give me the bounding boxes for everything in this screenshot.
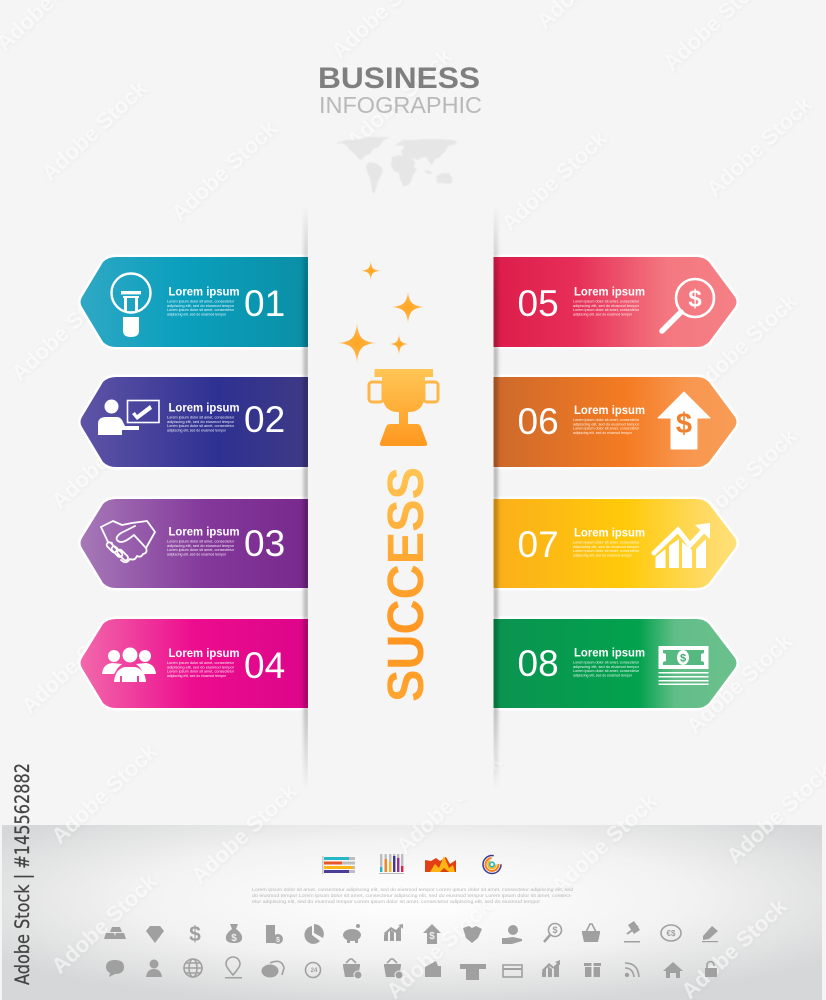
footer paragraph: do eiusmod tempor Lorem ipsum dolor sit amet, consectetur adipiscing elit, sed do eiusmod tempor Lorem ipsum dolor sit amet, consect- bbox=[252, 893, 573, 898]
icon: growth bars bbox=[384, 924, 403, 941]
icon: magnifier with dollar bbox=[662, 279, 714, 331]
watermarks: Adobe Stock bbox=[346, 238, 462, 349]
watermarks: Adobe Stock bbox=[701, 91, 817, 202]
banner 08 text: Lorem ipsum bbox=[574, 646, 645, 660]
watermarks: Adobe Stock bbox=[341, 43, 457, 154]
watermarks: Adobe Stock bbox=[36, 75, 152, 186]
icon: magnifier with dollar: $ bbox=[688, 286, 702, 312]
banner 05 bbox=[492, 257, 736, 347]
stock id label: Adobe Stock | #145562882 bbox=[11, 763, 34, 985]
banner 02 text bbox=[167, 402, 240, 432]
icon: banknotes bbox=[658, 646, 708, 685]
banner 02 bbox=[80, 377, 309, 467]
icon: money bag bbox=[226, 924, 242, 944]
icon: home bbox=[663, 962, 683, 978]
banner 08 text: adipiscing elit, sed do eiusmod tempor bbox=[573, 672, 633, 677]
watermarks: Adobe Stock bbox=[346, 618, 462, 729]
banner 05 text: adipiscing elit, sed do eiusmod tempor bbox=[573, 311, 633, 316]
watermarks: Adobe Stock bbox=[16, 608, 132, 719]
banner 04 text: Lorem ipsum dolor sit amet, consectetur bbox=[167, 669, 235, 674]
banner 07 text: adipiscing elit, sed do eiusmod tempor bbox=[573, 552, 633, 557]
banner 01 bbox=[80, 257, 309, 347]
banner 03 text: Lorem ipsum dolor sit amet, consectetur bbox=[167, 538, 235, 544]
watermarks: Adobe Stock bbox=[686, 423, 802, 534]
banner 05 text: adipiscing elit, sed do eiusmod tempor bbox=[573, 303, 640, 308]
icon: arrow dollar: $ bbox=[429, 931, 435, 942]
sparkles bbox=[336, 260, 426, 365]
icon row 1 bbox=[104, 921, 718, 946]
footer paragraph: etur adipiscing elit, sed do eiusmod tempor Lorem ipsum dolor sit amet, consectetur adipiscing elit, sed do eiusmod tempor bbox=[252, 899, 541, 904]
icon: arrow dollar bbox=[423, 924, 441, 944]
watermarks: Adobe Stock bbox=[546, 788, 662, 899]
icon: rss bbox=[625, 963, 639, 977]
banner 03 text: Lorem ipsum bbox=[168, 526, 240, 538]
footer paragraph: Lorem ipsum dolor sit amet, consectetur adipiscing elit, sed do eiusmod tempor Lorem ipsum dolor sit amet, consectetur adipiscing elit, sed bbox=[252, 887, 574, 892]
banner 02 text: Lorem ipsum bbox=[168, 402, 240, 414]
banner 01 text: Lorem ipsum dolor sit amet, consectetur bbox=[167, 307, 235, 312]
number 05: 05 bbox=[518, 283, 559, 324]
icon: gavel bbox=[624, 921, 640, 942]
banner 06 bbox=[492, 377, 736, 467]
icon: magnifier dollar: $ bbox=[552, 925, 558, 935]
banner 01 text: Lorem ipsum dolor sit amet, consectetur bbox=[167, 298, 235, 304]
icon: coins stack bbox=[266, 925, 283, 944]
banner 06 text: Lorem ipsum dolor sit amet, consectetur bbox=[573, 417, 640, 422]
banner 06 text: adipiscing elit, sed do eiusmod tempor bbox=[573, 421, 640, 426]
banner 01 text: Lorem ipsum bbox=[168, 286, 240, 298]
banner 01 text: adipiscing elit, sed do eiusmod tempor bbox=[167, 303, 235, 308]
world map bbox=[337, 137, 458, 194]
banner 07 text: Lorem ipsum dolor sit amet, consectetur bbox=[573, 540, 640, 544]
banner 01 text bbox=[167, 286, 240, 316]
banner 03 text: Lorem ipsum dolor sit amet, consectetur bbox=[167, 547, 235, 552]
icon: presenter at board bbox=[98, 400, 159, 435]
footer paragraph bbox=[252, 887, 574, 904]
banner 07 bbox=[492, 499, 736, 588]
banner 05 text: Lorem ipsum dolor sit amet, consectetur bbox=[573, 298, 640, 304]
icon row 2 bbox=[106, 957, 717, 980]
icon: map pin bbox=[225, 957, 242, 978]
mini chart: donut bbox=[483, 856, 501, 874]
icon: group of people bbox=[102, 648, 156, 682]
banner 04 text bbox=[167, 647, 240, 678]
banner 03 text: adipiscing elit, sed do eiusmod tempor bbox=[167, 551, 227, 556]
watermarks: Adobe Stock bbox=[46, 403, 162, 514]
watermarks: Adobe Stock bbox=[46, 738, 162, 849]
icon: up arrow with dollar: $ bbox=[676, 408, 692, 440]
watermarks: Adobe Stock bbox=[376, 413, 492, 524]
watermarks: Adobe Stock bbox=[166, 115, 282, 226]
icon: open lock bbox=[705, 962, 717, 977]
number 02: 02 bbox=[244, 399, 285, 440]
title bbox=[318, 62, 482, 118]
icon: speech bubble bbox=[106, 960, 124, 977]
icon: gold bars bbox=[104, 927, 126, 939]
icon: basket bbox=[582, 924, 600, 942]
banner 07 text: Lorem ipsum dolor sit amet, consectetur bbox=[573, 548, 640, 553]
banner 05 text: Lorem ipsum bbox=[574, 286, 645, 298]
icon: banknotes: $ bbox=[680, 652, 686, 664]
watermarks: Adobe Stock bbox=[186, 778, 302, 889]
banner 06 text: Lorem ipsum dolor sit amet, consectetur bbox=[573, 426, 640, 431]
banner 07 text: adipiscing elit, sed do eiusmod tempor bbox=[573, 544, 640, 549]
watermarks: Adobe Stock bbox=[686, 288, 802, 399]
number 07: 07 bbox=[518, 524, 559, 565]
banner 02 text: Lorem ipsum dolor sit amet, consectetur bbox=[167, 423, 235, 428]
watermarks: Adobe Stock bbox=[681, 628, 797, 739]
watermarks: Adobe Stock bbox=[46, 868, 162, 979]
banner 04 text: adipiscing elit, sed do eiusmod tempor bbox=[167, 673, 227, 678]
banner 08 text: Lorem ipsum dolor sit amet, consectetur bbox=[573, 668, 640, 673]
banner 03 bbox=[80, 499, 309, 588]
banner 06 text: Lorem ipsum bbox=[574, 404, 645, 417]
banner 04 text: Lorem ipsum bbox=[168, 647, 240, 660]
watermarks: Adobe Stock bbox=[6, 275, 122, 386]
banner 08 bbox=[492, 619, 736, 708]
icon: up arrow with dollar bbox=[658, 392, 710, 449]
number 04: 04 bbox=[244, 645, 285, 686]
title: BUSINESS bbox=[318, 62, 480, 95]
number 01: 01 bbox=[244, 283, 285, 324]
icon: money bag: $ bbox=[231, 933, 237, 944]
icon: currency cycle: €$ bbox=[667, 929, 676, 938]
bottom grey band bbox=[2, 825, 822, 1000]
icon: lightbulb magnifier bbox=[112, 274, 150, 337]
icon: handshake bbox=[463, 926, 482, 943]
icon: magnifier dollar bbox=[544, 924, 562, 942]
icon: hand with coin bbox=[502, 925, 522, 944]
icon: dollar: $ bbox=[189, 923, 201, 946]
icon: coins stack: $ bbox=[276, 937, 280, 944]
mini chart: area peaks bbox=[425, 856, 456, 872]
title: INFOGRAPHIC bbox=[319, 92, 482, 118]
icon: credit card bbox=[503, 965, 522, 977]
banner 02 text: adipiscing elit, sed do eiusmod tempor bbox=[167, 427, 227, 432]
success label: SUCCESS bbox=[377, 467, 434, 702]
watermarks: Adobe Stock bbox=[391, 748, 507, 859]
number 06: 06 bbox=[518, 401, 559, 442]
banner 04 text: adipiscing elit, sed do eiusmod tempor bbox=[167, 664, 235, 669]
banner 07 text: Lorem ipsum bbox=[574, 526, 645, 540]
icon: diamond bbox=[146, 926, 164, 943]
mini chart: horizontal bars bbox=[322, 856, 355, 874]
banner 06 text: adipiscing elit, sed do eiusmod tempor bbox=[573, 430, 633, 435]
icon: gift bbox=[584, 963, 601, 977]
banner 03 text bbox=[167, 526, 240, 556]
banner 04 bbox=[80, 619, 309, 708]
banner 03 text: adipiscing elit, sed do eiusmod tempor bbox=[167, 543, 235, 548]
banner 07 text bbox=[573, 526, 645, 557]
icon: person bbox=[146, 960, 162, 977]
icon: atm bbox=[460, 964, 486, 980]
icon: wallet bbox=[425, 961, 441, 977]
banner 01 text: adipiscing elit, sed do eiusmod tempor bbox=[167, 311, 227, 316]
banner 08 text bbox=[573, 646, 645, 677]
mini chart: vertical bars bbox=[379, 854, 404, 874]
icon: 24 hour phone bbox=[306, 962, 320, 978]
number 03: 03 bbox=[244, 523, 285, 564]
number 08: 08 bbox=[518, 643, 559, 684]
icon: growth chart bbox=[654, 523, 710, 568]
icon: basket plus bbox=[343, 959, 362, 979]
banner 05 text bbox=[573, 286, 645, 316]
icon: trophy bbox=[369, 369, 438, 446]
banner 02 text: Lorem ipsum dolor sit amet, consectetur bbox=[167, 414, 235, 420]
icon: chat bubbles bbox=[262, 961, 284, 978]
watermarks: Adobe Stock bbox=[496, 125, 612, 236]
icon: currency cycle bbox=[661, 925, 681, 941]
icon: piggy bank bbox=[343, 924, 361, 943]
banner 04 text: Lorem ipsum dolor sit amet, consectetur bbox=[167, 660, 235, 665]
icon: handshake bbox=[101, 521, 155, 562]
center column bbox=[304, 200, 497, 800]
banner 08 text: Lorem ipsum dolor sit amet, consectetur bbox=[573, 660, 640, 664]
icon: basket minus bbox=[384, 959, 403, 979]
icon: 24 hour phone: 24 bbox=[311, 968, 318, 974]
banner 06 text bbox=[573, 404, 645, 435]
icon: pie chart bbox=[304, 924, 324, 944]
banner 02 text: adipiscing elit, sed do eiusmod tempor bbox=[167, 419, 235, 424]
banner 05 text: Lorem ipsum dolor sit amet, consectetur bbox=[573, 307, 640, 312]
icon: growth chart bbox=[542, 960, 560, 977]
banner 08 text: adipiscing elit, sed do eiusmod tempor bbox=[573, 664, 640, 669]
icon: globe bbox=[184, 959, 202, 977]
icon: pen nib bbox=[702, 926, 718, 942]
